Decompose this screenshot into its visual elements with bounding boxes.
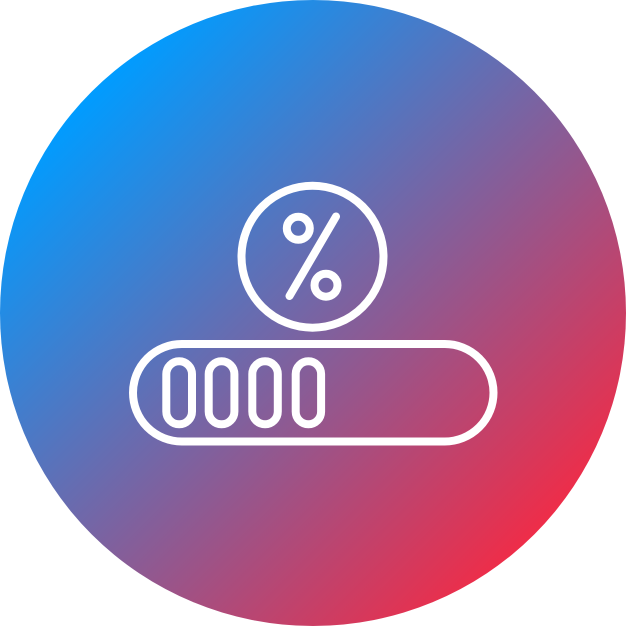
progress bar outline [133,344,494,442]
percent slash [290,216,336,296]
percent top ring [287,217,310,240]
progress segment 1 [166,361,192,424]
progress segment 4 [296,361,321,424]
icon: percent circle [242,186,384,328]
progress segment 2 [209,361,234,424]
icon: percent sign [287,216,338,297]
progress segment 3 [252,361,278,424]
percent bottom ring [314,274,338,297]
icon: line art [133,186,494,442]
